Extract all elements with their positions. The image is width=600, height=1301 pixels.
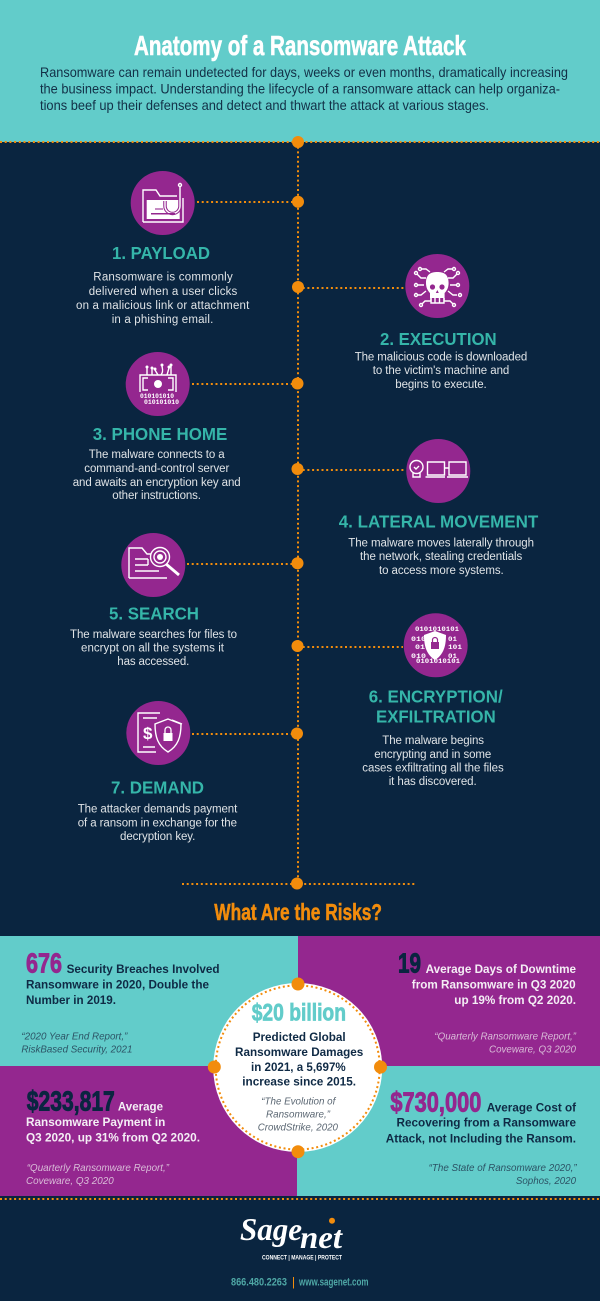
panel: $233,817 average payment: $233,817 (27, 1086, 115, 1117)
intro text: tions beef up their defenses and detect and thwart the attack at various stages. (40, 97, 489, 113)
statement (235, 1030, 364, 1089)
description: encrypt on all the systems it (81, 643, 225, 655)
panel: 676 security breaches: 676 (26, 947, 62, 978)
header panel (0, 0, 600, 142)
footer contact line (231, 1277, 369, 1289)
description: to access more systems. (379, 565, 504, 577)
citation: CrowdStrike, 2020 (258, 1121, 338, 1133)
description: the network, stealing credentials (360, 551, 523, 563)
panel: $233,817 average payment (0, 1066, 297, 1196)
panel: 676 security breaches: “2020 Year End Report,” (21, 1030, 128, 1042)
panel: $730,000 recovery cost: Average Cost of (487, 1100, 577, 1114)
icon: ransom note with shield lock (126, 701, 190, 765)
panel: $233,817 average payment: Coveware, Q3 2020 (26, 1175, 114, 1187)
icon: ransom note with shield lock: $ (143, 724, 153, 743)
icon: skull with circuits (405, 254, 469, 318)
heading: 1. PAYLOAD (112, 243, 210, 263)
icon: shield over binary: 01 (448, 636, 457, 643)
panel: 676 security breaches: RiskBased Security, 2021 (21, 1044, 132, 1056)
panel: 676 security breaches: Number in 2019. (26, 993, 116, 1007)
footer contact line: www.sagenet.com (298, 1277, 369, 1289)
icon: shield over binary: 01 (415, 644, 426, 651)
heading: what are the risks: What Are the Risks? (214, 899, 382, 925)
description: The attacker demands payment (78, 804, 238, 816)
footer logo: sagenet: CONNECT | MANAGE | PROTECT (262, 1254, 342, 1261)
icon: shield over binary: 01 (448, 653, 457, 660)
statement: in 2021, a 5,697% (251, 1060, 346, 1074)
icon: shield over binary: 010 (411, 636, 427, 643)
footer logo: sagenet (240, 1211, 343, 1261)
description: command-and-control server (84, 463, 229, 475)
description: of a ransom in exchange for the (78, 818, 237, 830)
heading: EXFILTRATION (376, 707, 496, 727)
panel: 19 days of downtime: up 19% from Q2 2020. (454, 993, 576, 1007)
panel: $730,000 recovery cost: $730,000 (390, 1086, 481, 1117)
description: The malicious code is downloaded (355, 352, 527, 364)
panel: 19 days of downtime: “Quarterly Ransomware Report,” (434, 1030, 576, 1042)
description: decryption key. (120, 831, 195, 843)
step 2: execution (355, 254, 527, 391)
description: cases exfiltrating all the files (362, 762, 504, 774)
panel: $730,000 recovery cost (297, 1066, 600, 1196)
description: The malware moves laterally through (348, 538, 534, 550)
heading: 4. LATERAL MOVEMENT (339, 511, 539, 531)
title: Anatomy of a Ransomware Attack (134, 30, 466, 61)
panel: 19 days of downtime (298, 936, 600, 1066)
step 7: demand (78, 701, 238, 843)
description (348, 538, 534, 577)
citation (258, 1096, 338, 1133)
icon: shield over binary: 101 (448, 644, 463, 651)
big number: $20 billion (252, 1000, 346, 1027)
intro text (40, 64, 568, 113)
description (76, 272, 250, 326)
panel: 19 days of downtime: 19 (398, 947, 421, 978)
heading: 5. SEARCH (109, 603, 199, 623)
footer logo: sagenet: net (300, 1219, 343, 1255)
panel: $233,817 average payment: Q3 2020, up 31% from Q2 2020. (26, 1131, 200, 1145)
description: The malware searches for files to (70, 629, 237, 641)
footer logo: sagenet: Sage (240, 1211, 302, 1247)
center circle: $20 billion (208, 978, 387, 1158)
description (73, 449, 241, 502)
timeline with dotted connectors and nodes (0, 136, 600, 890)
description (362, 735, 504, 788)
heading: 2. EXECUTION (380, 329, 497, 349)
description: on a malicious link or attachment (76, 300, 250, 312)
footer contact line: 866.480.2263 (231, 1277, 287, 1289)
description (355, 352, 527, 391)
panel: 19 days of downtime: Average Days of Downtime (426, 962, 576, 976)
heading (369, 686, 503, 727)
icon: shield over binary: 010 (411, 653, 427, 660)
step 4: lateral movement (339, 439, 539, 577)
heading: 3. PHONE HOME (93, 424, 227, 444)
panel: 676 security breaches: Ransomware in 2020, Double the (26, 977, 209, 991)
intro text: the business impact. Understanding the lifecycle of a ransomware attack can help organiza- (40, 81, 560, 97)
description (78, 804, 238, 843)
description: it has discovered. (389, 776, 477, 788)
statement: Predicted Global (253, 1030, 346, 1044)
description: in a phishing email. (112, 314, 213, 326)
description: to the victim's machine and (373, 365, 509, 377)
description: delivered when a user clicks (89, 286, 238, 298)
icon: chip with binary (126, 352, 190, 416)
description: The malware begins (382, 735, 484, 747)
description: encrypting and in some (374, 749, 491, 761)
step 5: search (70, 533, 237, 668)
panel: 676 security breaches (0, 936, 298, 1066)
description: other instructions. (112, 490, 201, 502)
icon: folder with fish hook (131, 171, 195, 235)
panel: $233,817 average payment: Average (118, 1100, 163, 1114)
panel: $233,817 average payment: “Quarterly Ransomware Report,” (27, 1162, 169, 1174)
icon: skull and laptops (406, 439, 470, 503)
icon: chip with binary: 010101010 (140, 393, 174, 400)
panel: $730,000 recovery cost: Attack, not Including the Ransom. (386, 1131, 576, 1145)
panel: $730,000 recovery cost: Sophos, 2020 (516, 1175, 576, 1187)
description (70, 629, 237, 668)
citation: “The Evolution of (261, 1096, 336, 1108)
statement: increase since 2015. (242, 1075, 356, 1089)
citation: Ransomware,” (266, 1109, 330, 1121)
icon: chip with binary: 010101010 (144, 399, 179, 406)
description: has accessed. (117, 656, 189, 668)
icon: shield over binary: 0101010101 (416, 658, 460, 665)
icon: document with magnifier (121, 533, 185, 597)
panel: $730,000 recovery cost: Recovering from a Ransomware (396, 1116, 576, 1130)
heading: 7. DEMAND (111, 777, 204, 797)
statement: Ransomware Damages (235, 1045, 364, 1059)
description: Ransomware is commonly (93, 272, 233, 284)
panel: 19 days of downtime: Coveware, Q3 2020 (489, 1044, 576, 1056)
footer dotted rule (0, 1198, 600, 1200)
step 6: encryption / exfiltration (362, 613, 504, 788)
description: The malware connects to a (89, 449, 225, 461)
panel: $730,000 recovery cost: “The State of Ransomware 2020,” (429, 1162, 577, 1174)
step 3: phone home (73, 352, 241, 502)
panel: 19 days of downtime: from Ransomware in Q3 2020 (412, 977, 576, 991)
heading: 6. ENCRYPTION/ (369, 686, 503, 706)
panel: 676 security breaches: Security Breaches Involved (67, 962, 220, 976)
description: begins to execute. (395, 379, 487, 391)
icon: shield over binary (404, 613, 468, 677)
panel: $233,817 average payment: Ransomware Payment in (26, 1115, 165, 1129)
description: and awaits an encryption key and (73, 477, 241, 489)
step 1: payload (76, 171, 250, 326)
icon: shield over binary: 0101010101 (415, 626, 459, 633)
